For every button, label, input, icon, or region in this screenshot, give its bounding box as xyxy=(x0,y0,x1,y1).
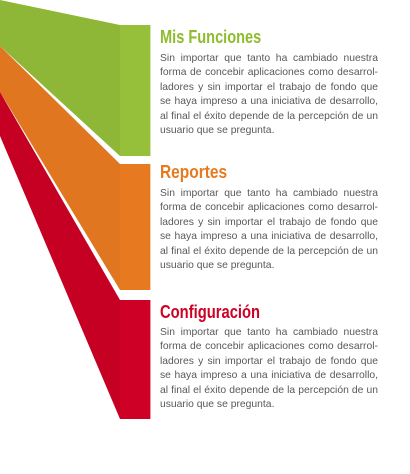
text block: Configuración: forma de concebir aplicaciones como desarrol- xyxy=(160,341,378,352)
text block: Reportes xyxy=(160,188,378,271)
text block: Mis Funciones: forma de concebir aplicaciones como desarrol- xyxy=(160,67,378,78)
text block: Mis Funciones: se haya impreso a una iniciativa de desarrollo, xyxy=(160,96,378,107)
text block: Configuración: Sin importar que tanto ha cambiado nuestra xyxy=(160,327,378,338)
text block: Configuración: usuario que se pregunta. xyxy=(160,399,274,410)
text block: Mis Funciones: al final el éxito depende de la percepción de un xyxy=(160,111,378,122)
text block: Mis Funciones: usuario que se pregunta. xyxy=(160,125,274,136)
text block: Reportes: ladores y sin importar el trabajo de fondo que xyxy=(160,217,378,228)
text block: Mis Funciones: ladores y sin importar el trabajo de fondo que xyxy=(160,82,378,93)
text block: Reportes: se haya impreso a una iniciativa de desarrollo, xyxy=(160,231,378,242)
panel: green ribbon xyxy=(0,0,151,156)
text block: Mis Funciones xyxy=(160,53,378,136)
heading: Configuración: Configuración xyxy=(160,302,260,322)
heading: Reportes: Reportes xyxy=(160,162,227,182)
heading: Mis Funciones: Mis Funciones xyxy=(160,27,261,47)
text block: Reportes: Sin importar que tanto ha cambiado nuestra xyxy=(160,188,378,199)
text block: Configuración: se haya impreso a una iniciativa de desarrollo, xyxy=(160,370,378,381)
panel: orange ribbon xyxy=(0,46,151,290)
text block: Configuración: al final el éxito depende de la percepción de un xyxy=(160,385,378,396)
text block: Reportes: al final el éxito depende de la percepción de un xyxy=(160,246,378,257)
text block: Configuración: ladores y sin importar el trabajo de fondo que xyxy=(160,356,378,367)
text block: Configuración xyxy=(160,327,378,410)
text block: Reportes: forma de concebir aplicaciones como desarrol- xyxy=(160,202,378,213)
panel: red ribbon xyxy=(0,92,151,419)
text block: Mis Funciones: Sin importar que tanto ha cambiado nuestra xyxy=(160,53,378,64)
text block: Reportes: usuario que se pregunta. xyxy=(160,260,274,271)
